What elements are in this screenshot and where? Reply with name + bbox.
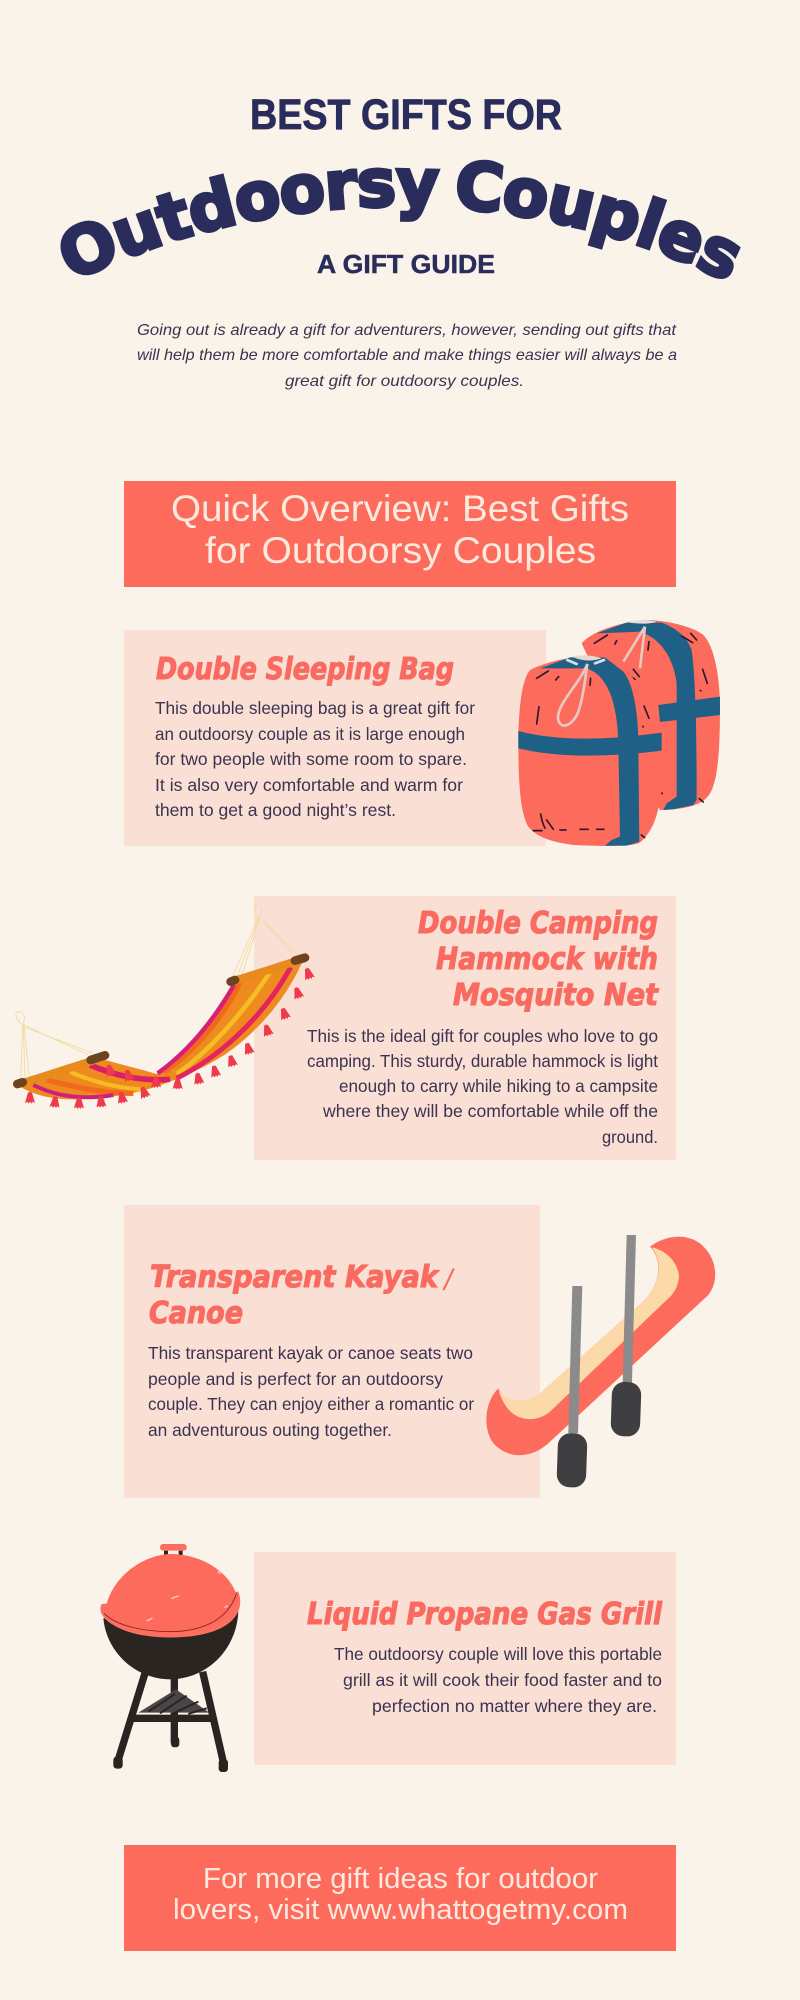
description: where they will be comfortable while off the (322, 1101, 658, 1121)
heading: Double Sleeping Bag (156, 652, 454, 687)
heading: Double Camping (418, 906, 658, 941)
description (307, 1026, 658, 1147)
description: people and is perfect for an outdoorsy (148, 1369, 443, 1389)
description: It is also very comfortable and warm for (155, 775, 463, 795)
intro paragraph: great gift for outdoorsy couples. (285, 373, 524, 390)
icon: kayak with paddles (486, 1235, 715, 1488)
icon: sleeping bags (518, 620, 720, 846)
description (334, 1644, 662, 1716)
heading: / (442, 1264, 455, 1297)
banner: footer call to action: For more gift ideas for outdoor (203, 1863, 598, 1895)
description: for two people with some room to spare. (155, 749, 467, 769)
heading: Canoe (149, 1296, 243, 1331)
panel: liquid propane gas grill (254, 1552, 676, 1765)
intro paragraph: will help them be more comfortable and make things easier will always be a (137, 347, 677, 364)
banner: quick overview (124, 481, 676, 587)
panel: transparent kayak (124, 1205, 540, 1498)
description (155, 698, 475, 820)
icon: hammock (16, 904, 315, 1109)
description: them to get a good night’s rest. (155, 800, 396, 820)
heading: Hammock with (436, 942, 658, 977)
intro paragraph (137, 322, 677, 390)
curved title: Outdoorsy Couples (60, 160, 741, 279)
panel: double camping hammock (254, 896, 676, 1160)
description: grill as it will cook their food faster and to (343, 1670, 662, 1690)
description (148, 1343, 474, 1440)
icon: kettle grill (100, 1544, 240, 1772)
description: an outdoorsy couple as it is large enough (155, 724, 465, 744)
description: enough to carry while hiking to a campsite (339, 1076, 658, 1096)
title line one: BEST GIFTS FOR (250, 91, 562, 139)
banner: footer call to action: lovers, visit www.whattogetmy.com (173, 1894, 628, 1926)
banner: footer call to action (124, 1845, 676, 1951)
heading: Liquid Propane Gas Grill (307, 1597, 663, 1632)
heading (149, 1260, 455, 1331)
description: The outdoorsy couple will love this portable (334, 1644, 662, 1664)
description: ground. (602, 1127, 658, 1147)
description: an adventurous outing together. (148, 1420, 392, 1440)
description: couple. They can enjoy either a romantic or (148, 1394, 474, 1414)
banner: quick overview: for Outdoorsy Couples (205, 530, 596, 571)
description: This double sleeping bag is a great gift for (155, 698, 475, 718)
heading (418, 906, 659, 1013)
description: camping. This sturdy, durable hammock is light (307, 1051, 658, 1071)
heading: Mosquito Net (453, 978, 659, 1013)
description: perfection no matter where they are. (372, 1696, 657, 1716)
intro paragraph: Going out is already a gift for adventurers, however, sending out gifts that (137, 322, 677, 339)
description: This is the ideal gift for couples who love to go (307, 1026, 658, 1046)
banner: quick overview: Quick Overview: Best Gifts (171, 488, 629, 529)
panel: double sleeping bag (124, 630, 546, 846)
header (60, 91, 741, 279)
heading: Transparent Kayak (150, 1260, 440, 1295)
subtitle: A GIFT GUIDE (317, 249, 495, 279)
description: This transparent kayak or canoe seats two (148, 1343, 473, 1363)
